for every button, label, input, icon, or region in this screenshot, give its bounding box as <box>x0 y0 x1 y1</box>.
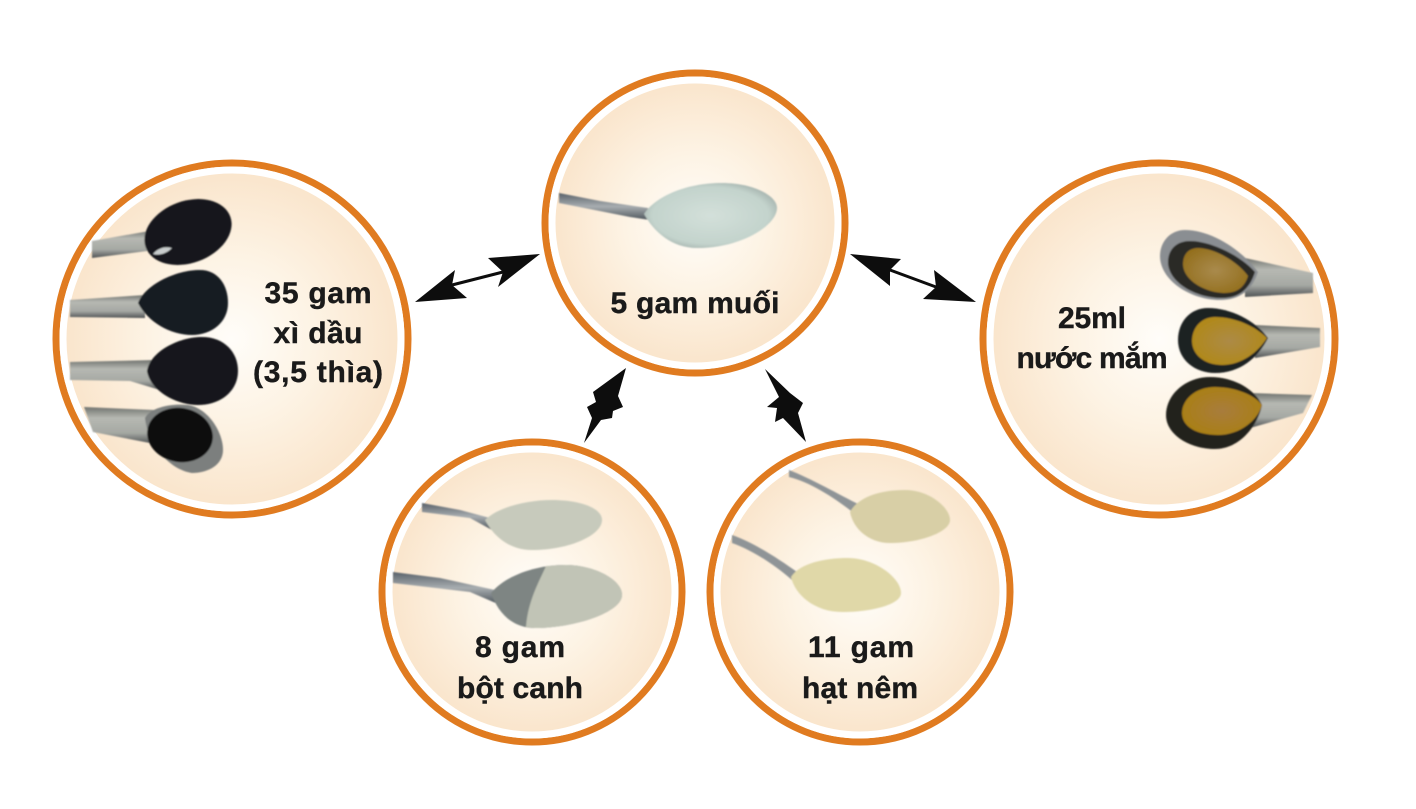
label: soy sauce <box>253 277 383 389</box>
panel: soup powder circle <box>382 442 682 742</box>
icon: soup powder spoons <box>393 500 622 628</box>
label: seasoning: 11 gam <box>808 631 914 664</box>
label: seasoning: hạt nêm <box>802 672 918 705</box>
label: fish sauce: 25ml <box>1058 302 1126 335</box>
panel: seasoning circle <box>710 442 1010 742</box>
panel: fish sauce circle <box>983 163 1335 515</box>
label: soy sauce: (3,5 thìa) <box>253 356 383 389</box>
panel: salt circle <box>545 73 845 373</box>
label: soup powder: bột canh <box>457 672 583 705</box>
label: soup powder <box>457 631 583 705</box>
icon: seasoning spoons <box>732 470 950 612</box>
label: soy sauce: xì dầu <box>274 317 362 350</box>
panel: soy sauce circle <box>56 163 408 515</box>
label: salt: 5 gam muối <box>610 287 780 320</box>
label: soy sauce: 35 gam <box>264 277 372 310</box>
icon: fish sauce spoons <box>1160 230 1320 449</box>
icon: soy sauce spoons <box>70 187 241 473</box>
label: fish sauce: nước mắm <box>1016 341 1168 375</box>
arrow: salt to seasoning <box>765 369 806 442</box>
label: fish sauce <box>1016 302 1168 375</box>
icon: spoon of salt <box>559 183 777 248</box>
arrow: salt to soup powder <box>584 368 626 443</box>
label: soup powder: 8 gam <box>475 631 565 664</box>
label: seasoning <box>802 631 918 705</box>
arrow: salt to fish sauce <box>850 254 976 302</box>
arrow: salt to soy sauce <box>415 254 540 302</box>
